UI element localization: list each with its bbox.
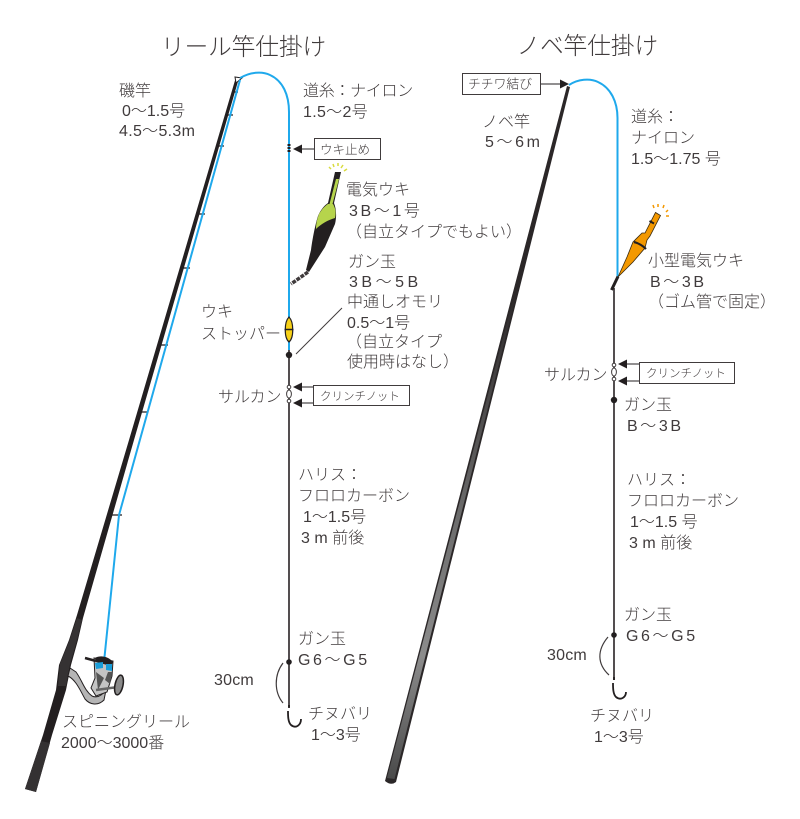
title: reel rod rig: リール竿仕掛け [161,34,326,61]
label: rod [119,82,195,140]
label: pole hook [590,708,654,746]
callout: clinch knot: クリンチノット [320,390,400,403]
label: pole split shot G6-G5: G6～G5 [626,628,698,645]
label: main line: 1.5～2号 [303,104,368,121]
callout: float stop knot [289,138,380,160]
label: pole main line: 1.5～1.75 号 [631,151,721,168]
label: pole main line [631,108,721,168]
dimension: 30cm [214,663,283,703]
label: pole hook: 1～3号 [594,729,644,746]
icon: pole split shot [611,632,617,638]
pole rod [385,86,570,784]
label: float stopper: ストッパー [201,326,281,343]
label: spinning reel: スピニングリール [62,713,190,731]
dimension: pole 30cm: 30cm [547,647,587,664]
icon: swivel [287,385,291,403]
label: leader: 1～1.5号 [303,509,366,526]
label: split shot and sinker: 中通しオモリ [347,293,443,311]
label: spinning reel: 2000～3000番 [61,734,164,752]
label: electric float: 3B～1号 [349,203,422,220]
callout: pole clinch knot: クリンチノット [646,367,726,380]
label: rod: 0～1.5号 [122,103,185,120]
label: split shot G6-G5: ガン玉 [298,630,346,648]
pointer line to sinker [296,308,342,354]
callout: float stop knot: ウキ止め [320,143,370,157]
icon: spinning reel [68,656,125,704]
label: pole split shot: ガン玉 [624,396,672,414]
label: float stopper: ウキ [201,304,233,321]
label: pole main line: 道糸： [631,108,679,126]
icon: pole sinker [611,397,617,403]
icon: pole swivel [612,363,616,381]
label: pole leader: ハリス： [627,472,691,489]
icon: hook [288,705,301,727]
label: pole leader: 3m前後 [629,534,692,552]
label: rod: 4.5～5.3m [119,123,195,140]
label: float stopper [201,304,281,343]
callout: clinch knot [293,382,410,408]
label: split shot and sinker: 3B～5B [349,274,422,291]
icon: sinker [286,352,292,358]
label: hook: 1～3号 [311,727,361,744]
label: swivel: サルカン [218,389,282,406]
label: pole split shot: B～3B [627,418,684,435]
label: small electric float [648,252,776,311]
pole rod blue line [569,80,618,277]
reel rig leader [288,350,290,707]
label: leader [298,467,410,547]
label: leader: フロロカーボン [298,487,410,505]
label: split shot G6-G5 [298,630,370,669]
label: split shot and sinker: 使用時はなし） [347,353,459,371]
label: small electric float: 小型電気ウキ [648,252,744,270]
pole rig leader [613,288,615,680]
label: split shot and sinker: （自立タイプ [346,333,442,351]
label: spinning reel [61,713,190,752]
label: pole leader [627,472,739,552]
label: electric float: （自立タイプでもよい） [346,223,522,241]
label: pole split shot [624,396,684,435]
label: split shot and sinker [346,253,459,371]
label: pole rod [482,113,543,151]
reel rod blue line [104,73,289,662]
icon: split shot [286,659,292,665]
icon: pole hook [613,677,626,699]
label: small electric float: （ゴム管で固定） [648,293,776,311]
callout: chichiwa knot [462,74,569,94]
icon: small electric float [612,204,669,290]
label: hook: チヌバリ [308,706,372,723]
label: hook [308,706,372,744]
label: main line: 道糸：ナイロン [303,82,413,100]
label: electric float [346,181,522,241]
label: leader: ハリス： [298,467,362,484]
label: pole swivel: サルカン [544,367,608,384]
dimension: 30cm: 30cm [214,672,254,689]
label: pole hook: チヌバリ [590,708,654,725]
icon: electric float [291,163,347,284]
label: leader: 3m前後 [301,529,364,547]
label: pole split shot G6-G5: ガン玉 [624,606,672,624]
label: pole leader: 1～1.5 号 [630,514,698,531]
label: pole main line: ナイロン [631,130,695,147]
label: pole rod: 5～6m [485,134,543,151]
callout: pole clinch knot [618,360,734,386]
label: split shot G6-G5: G6～G5 [298,652,370,669]
label: split shot and sinker: 0.5～1号 [347,315,410,332]
label: electric float: 電気ウキ [346,181,410,199]
label: split shot and sinker: ガン玉 [348,253,396,271]
title: pole rod rig: ノベ竿仕掛け [516,33,658,60]
label: small electric float: B～3B [650,274,707,291]
label: rod: 磯竿 [119,82,151,100]
label: pole split shot G6-G5 [624,606,698,645]
label: pole leader: フロロカーボン [627,492,739,510]
reel rod [25,77,242,792]
label: main line [303,82,413,121]
label: pole rod: ノベ竿 [482,113,530,131]
icon: float stopper [284,317,294,342]
dimension: pole 30cm [547,637,609,675]
callout: chichiwa knot: チチワ結び [468,76,532,92]
